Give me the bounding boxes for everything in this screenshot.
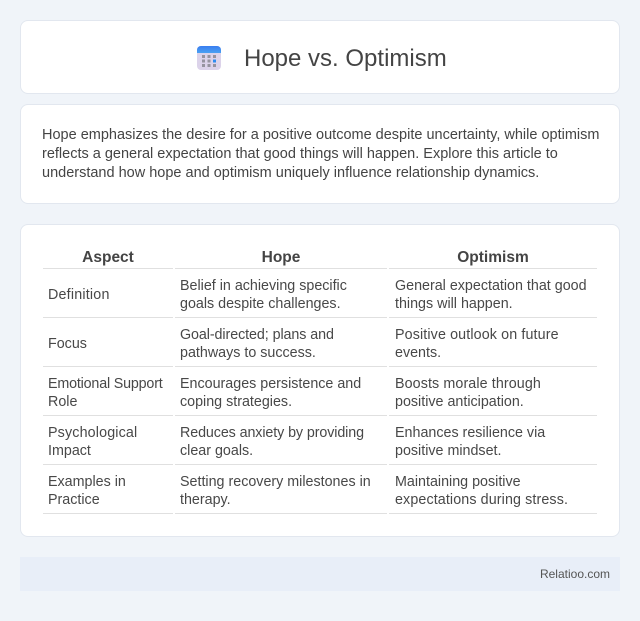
row: Examples in Practice [48,474,126,508]
footer credit: Relatioo.com [540,567,610,581]
panel: comparison table [20,224,620,537]
panel: header card [20,20,620,94]
column header: Aspect: Aspect [82,249,134,266]
comparison table: Boosts morale through [395,376,541,392]
row: Examples in Practice: Practice [48,492,100,508]
comparison table: events. [395,345,441,361]
row: Emotional Support Role [48,376,163,410]
row: Focus: Focus [48,336,87,352]
comparison table: Belief in achieving specific [180,278,347,294]
panel: intro text [20,104,620,204]
comparison table: Encourages persistence and [180,376,361,392]
comparison table: goals despite challenges. [180,296,341,312]
comparison table: things will happen. [395,296,513,312]
comparison table: pathways to success. [180,345,316,361]
comparison table: Maintaining positive [395,474,521,490]
comparison table: Enhances resilience via [395,425,545,441]
icon: calendar [197,46,221,70]
comparison table: Positive outlook on future [395,327,559,343]
comparison table: clear goals. [180,443,253,459]
comparison table: expectations during stress. [395,492,568,508]
intro paragraph: reflects a general expectation that good things will happen. Explore this article to [42,146,558,162]
comparison table: Reduces anxiety by providing [180,425,364,441]
intro paragraph: Hope emphasizes the desire for a positive outcome despite uncertainty, while optimism [42,127,599,143]
comparison table: coping strategies. [180,394,292,410]
row: Examples in Practice: Examples in [48,474,126,490]
row: Emotional Support Role: Emotional Support [48,376,163,392]
row: Definition: Definition [48,287,110,303]
comparison table: therapy. [180,492,231,508]
row: Psychological Impact: Impact [48,443,91,459]
comparison table: positive mindset. [395,443,501,459]
column header: Optimism: Optimism [457,249,529,266]
row: Psychological Impact [48,425,137,459]
row: Psychological Impact: Psychological [48,425,137,441]
intro paragraph [42,127,599,181]
intro paragraph: understand how hope and optimism uniquely influence relationship dynamics. [42,165,539,181]
row: Emotional Support Role: Role [48,394,77,410]
comparison table: positive anticipation. [395,394,524,410]
comparison table: Goal-directed; plans and [180,327,334,343]
column header: Hope: Hope [262,249,300,266]
comparison table: General expectation that good [395,278,587,294]
comparison table: Setting recovery milestones in [180,474,371,490]
title: Hope vs. Optimism [244,45,447,72]
footer bar [20,557,620,591]
